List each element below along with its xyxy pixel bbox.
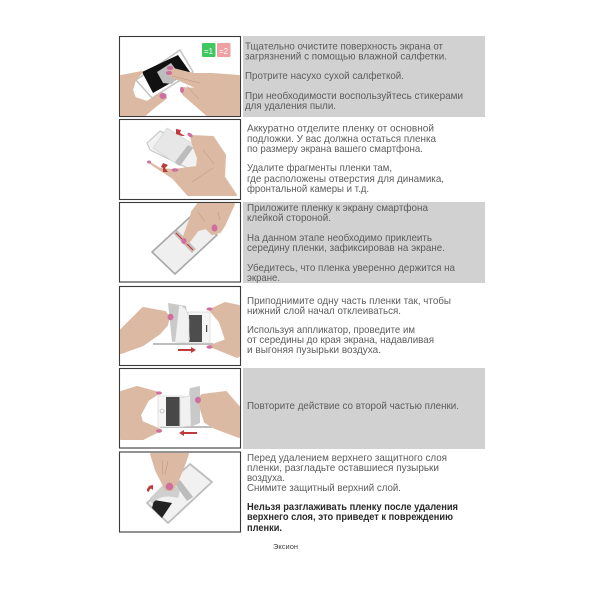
panel: step 6 text: Снимите защитный верхний слой. — [247, 483, 401, 494]
panel: step 2 text: подложки. У вас должна остаться пленка — [247, 134, 436, 145]
panel: step 1 text: для удаления пыли. — [245, 101, 336, 112]
panel: step 6 text: Нельзя разглаживать пленку после удаления — [247, 502, 458, 513]
illustration: step 5 second part of the film — [120, 368, 240, 448]
panel: step 3 text: клейкой стороной. — [247, 213, 331, 224]
panel: step 6 text: верхнего слоя, это приведет к повреждению — [247, 512, 453, 523]
hand pressing down — [182, 204, 234, 243]
phone and film — [147, 128, 199, 170]
right hand — [198, 392, 239, 437]
panel: step 4 text: Приподнимите одну часть пленки так, чтобы — [247, 295, 451, 307]
illustration: step 1 cleaning the screen — [120, 36, 240, 116]
panel: step 2 text: где расположены отверстия для динамика, — [247, 174, 444, 185]
illustration: step 2 separating the film — [120, 120, 240, 200]
panel: step 1 text: загрязнений с помощью влажной салфетки. — [245, 50, 447, 62]
icon: cleaning stickers: =2 — [219, 47, 229, 56]
icon: cleaning stickers: =1 — [204, 47, 214, 56]
arrow: lift up — [147, 485, 153, 492]
left hand — [121, 72, 166, 115]
panel: step 6 text: воздуха. — [247, 473, 285, 484]
panel: step 3 text: Убедитесь, что пленка уверенно держится на — [247, 262, 455, 274]
panel: step 5 text — [243, 368, 485, 449]
right hand — [210, 303, 239, 357]
panel: step 1 text: Тщательно очистите поверхность экрана от — [245, 42, 443, 52]
phone with second half peeled — [158, 386, 212, 428]
panel: step 3 text: экране. — [247, 273, 280, 284]
arrow: left — [179, 430, 197, 436]
panel: step 2 text: Аккуратно отделите пленку от основной — [247, 124, 434, 134]
panel: step 3 text: На данном этапе необходимо приклеить — [247, 232, 432, 244]
icon: cleaning stickers — [202, 43, 230, 57]
phone with half-peeled film — [153, 303, 213, 345]
panel: step 6 text: пленки, разгладьте оставшиеся пузырьки — [247, 463, 439, 474]
panel: step 3 text — [243, 202, 485, 284]
panel: step 4 text: и выгоняя пузырьки воздуха. — [247, 345, 381, 356]
footer label: Эксион — [273, 544, 298, 551]
illustration: step 3 applying the film — [120, 202, 240, 282]
panel: step 2 text: фронтальной камеры и т.д. — [247, 183, 369, 195]
arrow: right — [178, 347, 196, 353]
panel: step 5 text: Повторите действие со второй частью пленки. — [247, 401, 459, 412]
panel: step 6 text — [247, 453, 458, 534]
panel: step 6 text: пленки. — [247, 523, 282, 534]
arrows: peel direction — [161, 129, 185, 172]
panel: step 3 text: середину пленки, зафиксировав на экране. — [247, 242, 445, 254]
panel: step 1 text: Протрите насухо сухой салфеткой. — [245, 70, 404, 82]
phone with film — [152, 217, 217, 274]
panel: step 4 text: нижний слой начал отклеиваться. — [247, 306, 401, 317]
phone being wiped — [136, 50, 193, 98]
phone with top layer being removed — [147, 464, 212, 523]
panel: step 3 text: Приложите пленку к экрану смартфона — [247, 202, 428, 214]
illustration: step 4 peeling the film with applicator — [120, 286, 240, 366]
left hand — [121, 308, 169, 353]
panel: step 4 text: Используя аппликатор, проведите им — [247, 325, 415, 336]
illustration: step 6 removing the top layer — [120, 452, 240, 532]
panel: step 2 text — [247, 124, 444, 195]
panel: step 1 text — [243, 36, 485, 117]
left hand — [121, 387, 161, 439]
panel: step 6 text: Перед удалением верхнего защитного слоя — [247, 453, 447, 464]
panel: step 2 text: Удалите фрагменты пленки там, — [247, 162, 392, 174]
right hand — [169, 68, 239, 115]
panel: step 1 text: При необходимости воспользуйтесь стикерами — [245, 90, 463, 102]
panel: step 4 text: от середины до края экрана, надавливая — [247, 335, 434, 346]
panel: step 4 text — [247, 295, 451, 356]
panel: step 2 text: по размеру экрана вашего смартфона. — [247, 143, 423, 155]
hand from above — [151, 454, 188, 490]
hand — [150, 136, 236, 195]
